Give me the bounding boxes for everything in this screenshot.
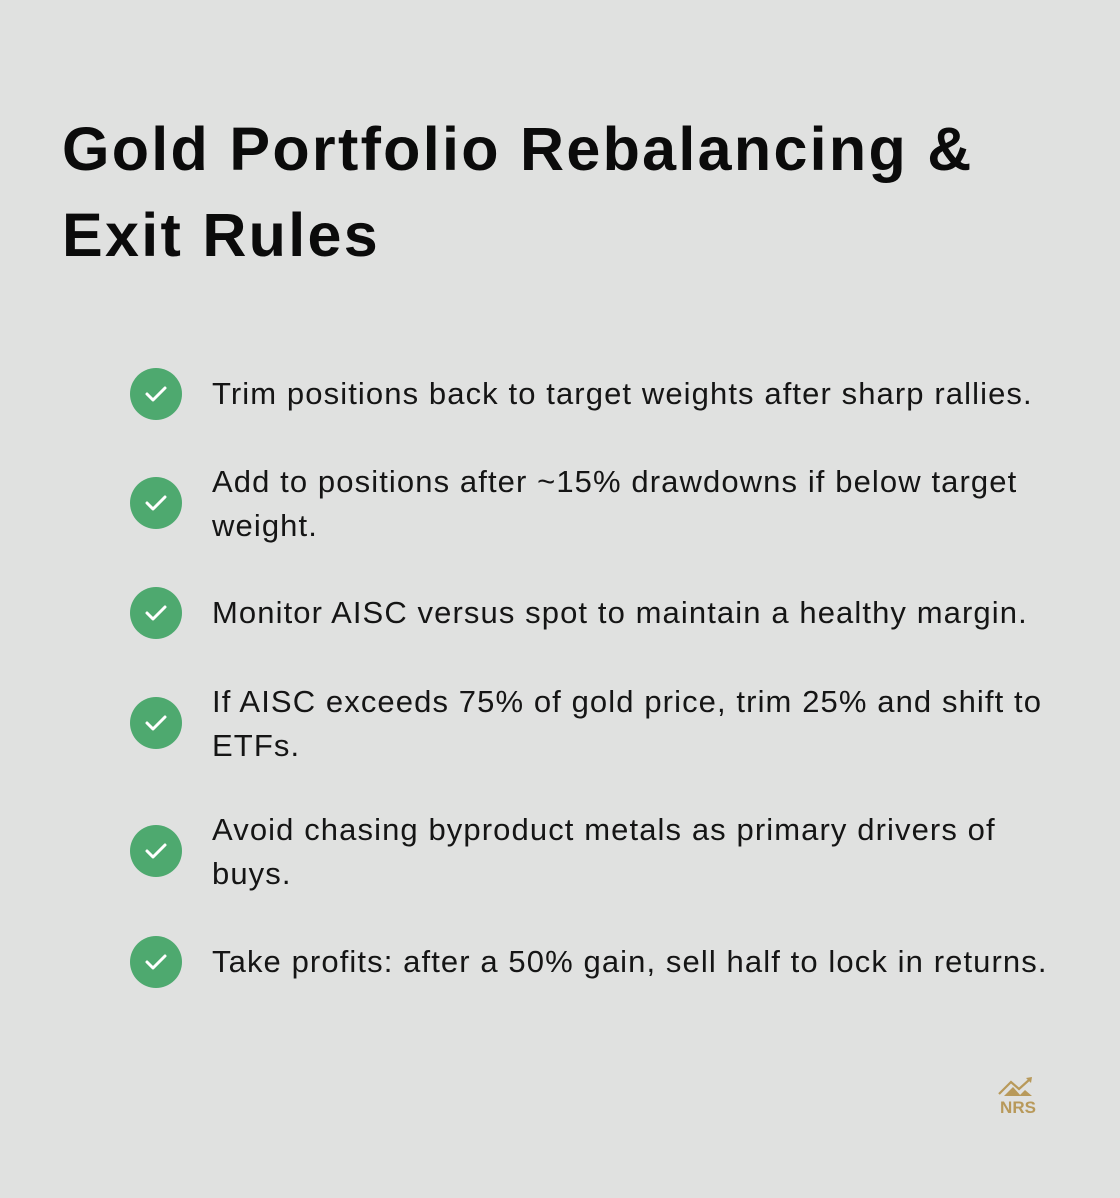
text: weight. (212, 508, 318, 543)
text: If AISC exceeds 75% of gold price, trim 25% and shift to (212, 684, 1042, 719)
text: Add to positions after ~15% drawdowns if below target (212, 464, 1017, 499)
icon: check (130, 587, 182, 639)
item 5 (130, 812, 996, 891)
text: Take profits: after a 50% gain, sell half to lock in returns. (212, 944, 1048, 979)
item 1 (130, 368, 1033, 420)
text: ETFs. (212, 728, 300, 763)
title: Exit Rules (62, 201, 380, 269)
logo: NRS (998, 1077, 1036, 1116)
item 6 (130, 936, 1048, 988)
text: Avoid chasing byproduct metals as primary drivers of (212, 812, 996, 847)
text (212, 684, 1042, 763)
text (212, 812, 996, 891)
icon: check (130, 825, 182, 877)
text: buys. (212, 856, 292, 891)
text (212, 464, 1017, 543)
text: Monitor AISC versus spot to maintain a healthy margin. (212, 595, 1028, 630)
item 2 (130, 464, 1017, 543)
text: Trim positions back to target weights after sharp rallies. (212, 376, 1033, 411)
icon: check (130, 477, 182, 529)
icon: check (130, 936, 182, 988)
item 4 (130, 684, 1042, 763)
icon: check (130, 368, 182, 420)
title: Gold Portfolio Rebalancing & (62, 115, 974, 183)
icon: check (130, 697, 182, 749)
title (62, 115, 974, 269)
item 3 (130, 587, 1028, 639)
